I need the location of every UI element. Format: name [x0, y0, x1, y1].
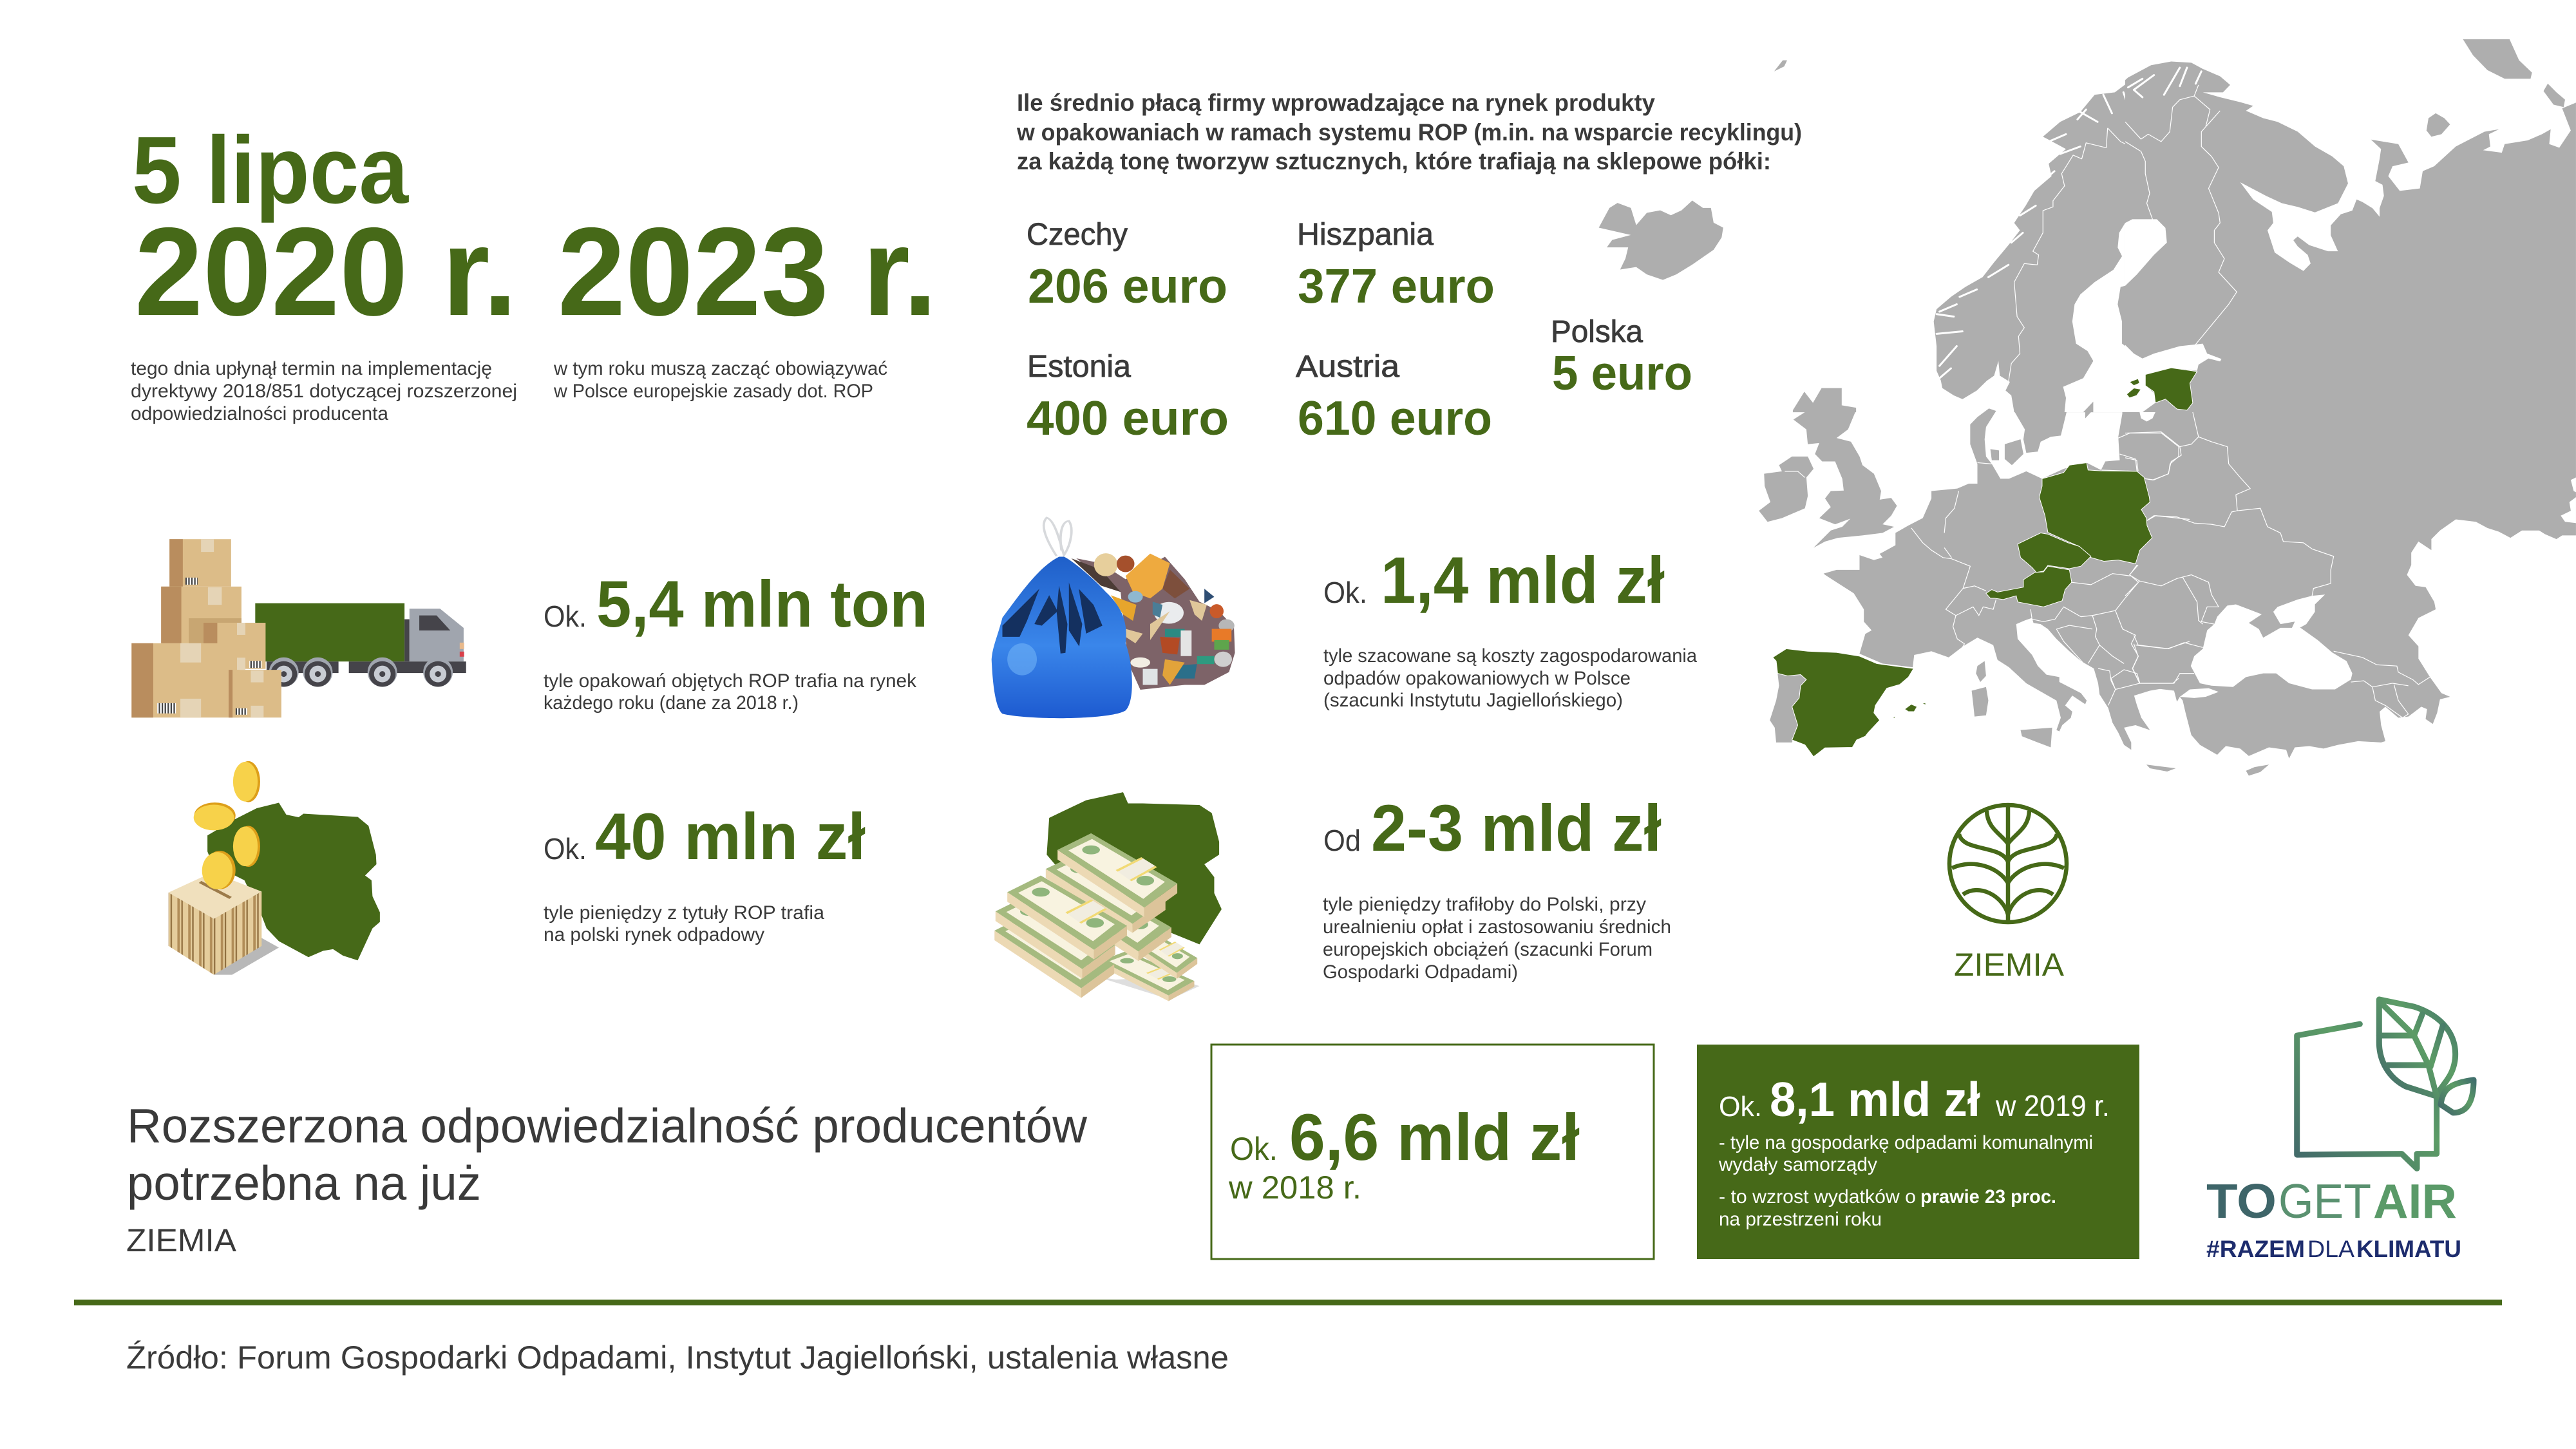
stat: 2-3 mld zł: urealnieniu opłat i zastosowaniu średnich: [1323, 916, 1671, 938]
text: 2023 description: w tym roku muszą zacząć obowiązywać: [553, 358, 887, 379]
stat: 1,4 mld zł: (szacunki Instytutu Jagiellońskiego): [1323, 690, 1623, 711]
stat: 1,4 mld zł: 1,4 mld zł: [1381, 544, 1665, 617]
text: 2020 description: dyrektywy 2018/851 dotyczącej rozszerzonej: [131, 381, 517, 402]
fee: Estonia: [1027, 350, 1229, 445]
fee: Czechy: [1027, 218, 1227, 313]
text: 2020 description: [131, 358, 517, 424]
stat: 40 mln zł: na polski rynek odpadowy: [544, 924, 764, 945]
map: Black Sea and other inland seas: [2125, 412, 2576, 718]
stat: 2-3 mld zł: 2-3 mld zł: [1371, 791, 1662, 865]
stat: 40 mln zł: [544, 800, 866, 945]
heading: 5 lipca: 5 lipca: [132, 117, 410, 223]
box: 8,1 mld zł in 2019: - to wzrost wydatków o: [1719, 1186, 1916, 1208]
map: Czechia highlighted: [2018, 533, 2091, 573]
stat: 1,4 mld zł: [1323, 544, 1697, 711]
box: 8,1 mld zł in 2019: w 2019 r.: [1995, 1089, 2110, 1122]
box: 8,1 mld zł in 2019: 8,1 mld zł: [1770, 1072, 1980, 1126]
logo wordmark: AIR: [2373, 1174, 2457, 1228]
map: Spain highlighted: [1773, 649, 1926, 757]
box: 8,1 mld zł in 2019: wydały samorządy: [1718, 1154, 1877, 1175]
map: Finland and northern Russia: [2125, 39, 2576, 412]
heading: 2023 r.: 2023 r.: [558, 202, 937, 342]
logo wordmark: GET: [2278, 1174, 2371, 1228]
box: 8,1 mld zł in 2019: - tyle na gospodarkę odpadami komunalnymi: [1719, 1132, 2093, 1153]
title second line: potrzebna na już: [127, 1156, 481, 1210]
fee: Czechy: Czechy: [1027, 218, 1128, 252]
intro text: [1016, 90, 1802, 175]
fee: Hiszpania: Hiszpania: [1297, 218, 1434, 252]
divider line: [74, 1300, 2502, 1305]
text: 2020 description: odpowiedzialności producenta: [131, 403, 388, 424]
map: eastern Europe and Turkey: [2123, 412, 2576, 775]
stat: 40 mln zł: Ok.: [544, 832, 587, 866]
logo hashtag: KLIMATU: [2356, 1236, 2461, 1262]
stat: 5,4 mln ton: tyle opakowań objętych ROP trafia na rynek: [544, 670, 917, 692]
map: Iceland: [1599, 200, 1723, 280]
icon: boxes and truck: [131, 539, 466, 717]
map: Austria highlighted: [1986, 566, 2072, 607]
fee: Polska: 5 euro: [1552, 346, 1692, 400]
headline block: dates: [131, 117, 937, 424]
stat: 2-3 mld zł: [1323, 791, 1671, 983]
stat: 2-3 mld zł: Gospodarki Odpadami): [1323, 961, 1518, 983]
logo hashtag: [2206, 1236, 2461, 1262]
icon: stacks of money over Poland: [994, 792, 1222, 1001]
logo: TOGETAIR: [2206, 999, 2474, 1262]
map: Poland highlighted: [2039, 462, 2152, 564]
text: 2020 description: tego dnia upłynął termin na implementację: [131, 358, 492, 379]
stat: 1,4 mld zł: odpadów opakowaniowych w Polsce: [1323, 668, 1631, 689]
map: western and central Europe: [1759, 408, 2190, 772]
logo: ZIEMIA: ZIEMIA: [1954, 947, 2065, 983]
fee: Polska: Polska: [1551, 315, 1643, 349]
stat: 2-3 mld zł: Od: [1323, 824, 1361, 857]
stat: 5,4 mln ton: każdego roku (dane za 2018 r.): [544, 692, 799, 714]
intro text: za każdą tonę tworzyw sztucznych, które trafiają na sklepowe półki:: [1017, 148, 1771, 175]
author: ZIEMIA: [126, 1222, 237, 1258]
stat: 5,4 mln ton: [544, 567, 928, 714]
fee: Estonia: Estonia: [1027, 350, 1131, 384]
box: 6,6 mld zł in 2018: [1211, 1045, 1654, 1259]
fee: Estonia: 400 euro: [1027, 391, 1229, 445]
box: 8,1 mld zł in 2019: Ok.: [1719, 1091, 1762, 1122]
map: Estonia highlighted: [2126, 368, 2197, 410]
text: 2023 description: [553, 358, 887, 402]
logo wordmark: TO: [2206, 1174, 2277, 1228]
icon: coins falling into box over Poland: [169, 761, 380, 975]
box: 6,6 mld zł in 2018: Ok.: [1230, 1131, 1278, 1167]
fee: Hiszpania: [1297, 218, 1495, 313]
source note: Źródło: Forum Gospodarki Odpadami, Instytut Jagielloński, ustalenia własne: [126, 1340, 1229, 1376]
heading: 2020 r.: 2020 r.: [135, 202, 517, 342]
logo: ZIEMIA: [1949, 805, 2067, 983]
stat: 40 mln zł: tyle pieniędzy z tytuły ROP trafia: [544, 902, 824, 923]
map: Scandinavia: [1774, 61, 2144, 412]
stat: 1,4 mld zł: tyle szacowane są koszty zagospodarowania: [1323, 645, 1697, 667]
fee: Austria: [1296, 350, 1492, 445]
panel: fees per country: [1016, 90, 1802, 445]
title block: [126, 1099, 1088, 1258]
title: Rozszerzona odpowiedzialność producentów: [127, 1099, 1088, 1153]
fee: Hiszpania: 377 euro: [1298, 259, 1495, 313]
icon: trash bag and waste pile: [992, 518, 1235, 718]
stat: 5,4 mln ton: Ok.: [544, 600, 587, 633]
box: 6,6 mld zł in 2018: 6,6 mld zł: [1289, 1101, 1580, 1174]
stat: 5,4 mln ton: 5,4 mln ton: [596, 567, 928, 641]
fee: Polska: [1551, 315, 1692, 400]
intro text: w opakowaniach w ramach systemu ROP (m.in. na wsparcie recyklingu): [1016, 119, 1802, 146]
fee: Czechy: 206 euro: [1028, 259, 1227, 313]
logo wordmark: [2206, 1174, 2457, 1228]
box: 8,1 mld zł in 2019: na przestrzeni roku: [1719, 1209, 1882, 1230]
text: 2023 description: w Polsce europejskie zasady dot. ROP: [553, 381, 873, 402]
fee: Austria: Austria: [1296, 350, 1399, 384]
logo hashtag: #RAZEM: [2206, 1236, 2305, 1262]
stat: 40 mln zł: 40 mln zł: [595, 800, 866, 873]
stat: 1,4 mld zł: Ok.: [1323, 576, 1367, 609]
map of Europe: [1599, 39, 2576, 775]
stat: 2-3 mld zł: europejskich obciążeń (szacunki Forum: [1323, 939, 1653, 960]
logo icon: speech bubble with leaf: [2297, 999, 2474, 1169]
intro text: Ile średnio płacą firmy wprowadzające na rynek produkty: [1017, 90, 1655, 116]
stat: 2-3 mld zł: tyle pieniędzy trafiłoby do Polski, przy: [1323, 894, 1646, 915]
fee: Austria: 610 euro: [1298, 391, 1492, 445]
logo hashtag: DLA: [2307, 1236, 2354, 1262]
box: 8,1 mld zł in 2019: prawie 23 proc.: [1920, 1186, 2056, 1208]
box: 8,1 mld zł in 2019: [1697, 1045, 2139, 1259]
box: 6,6 mld zł in 2018: w 2018 r.: [1228, 1170, 1361, 1206]
